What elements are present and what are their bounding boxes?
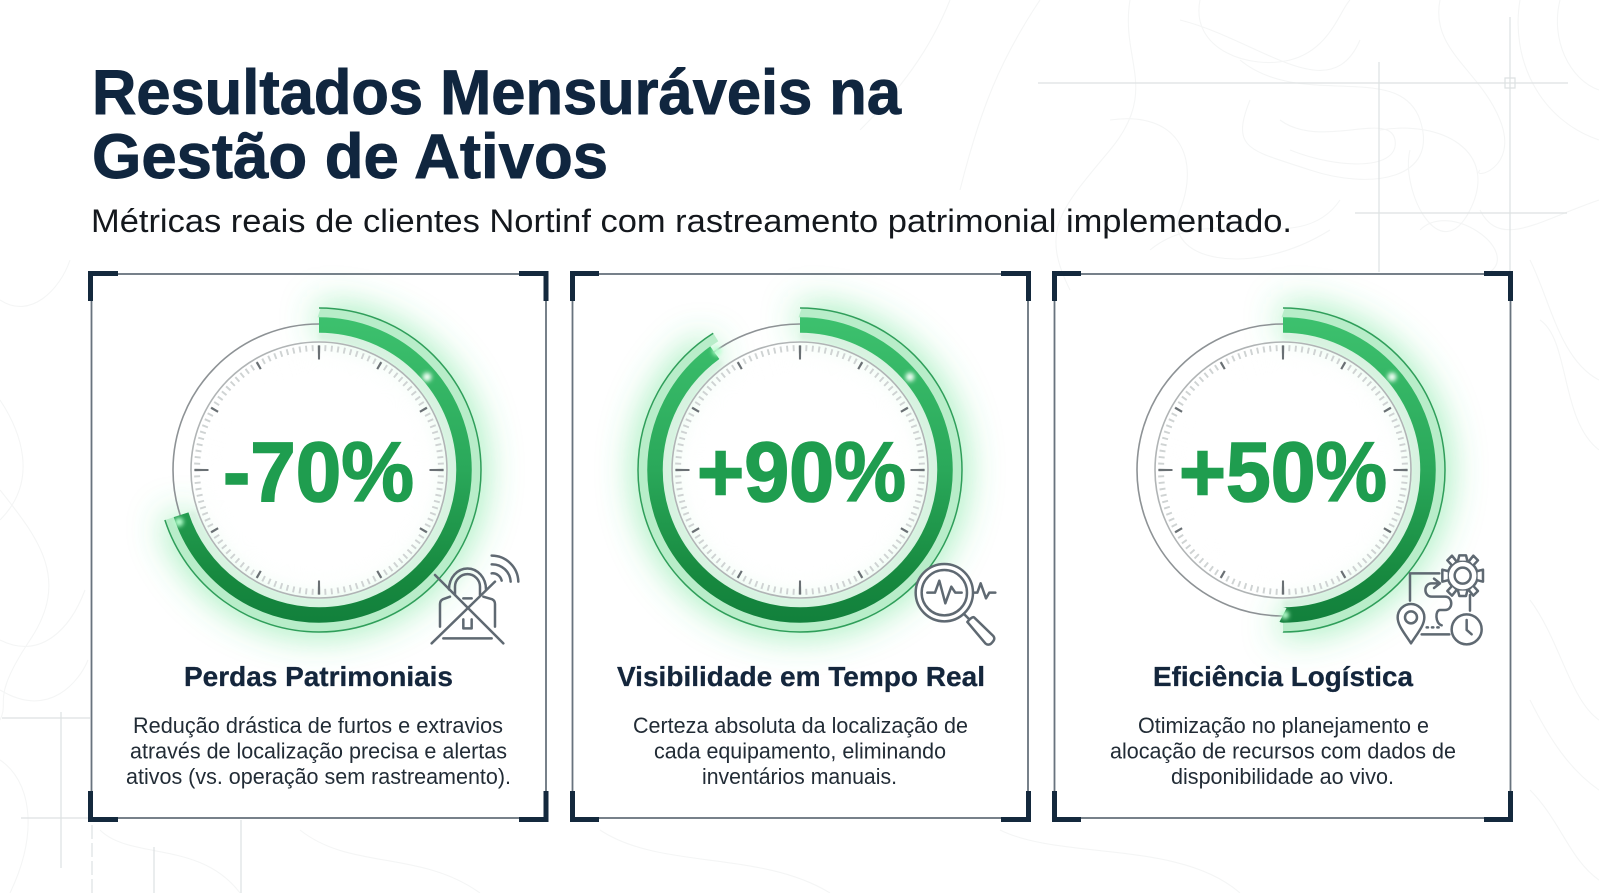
- card heading: Visibilidade em Tempo Real: [617, 661, 985, 692]
- value: +90%: [697, 425, 906, 519]
- panel: eficiencia logistica: [1054, 274, 1510, 820]
- title: Resultados Mensuráveis na: [92, 58, 902, 128]
- card frame with corner brackets: [572, 274, 1028, 820]
- card description: Otimização no planejamento e: [1138, 713, 1429, 738]
- panel: perdas patrimoniais: [90, 274, 546, 820]
- card heading: Eficiência Logística: [1153, 661, 1413, 692]
- gauge: +50%: [1121, 308, 1445, 632]
- card description: [633, 713, 968, 789]
- card description: Certeza absoluta da localização de: [633, 713, 968, 738]
- icon: route, gear, pin and clock: [1398, 555, 1483, 644]
- title: Gestão de Ativos: [92, 122, 608, 192]
- card description: alocação de recursos com dados de: [1110, 738, 1456, 764]
- card heading: Perdas Patrimoniais: [184, 661, 453, 692]
- gauge: +90%: [638, 308, 962, 632]
- card description: cada equipamento, eliminando: [654, 738, 946, 764]
- icon: magnifier with pulse: [916, 564, 995, 645]
- card description: [1110, 713, 1456, 789]
- subtitle: Métricas reais de clientes Nortinf com rastreamento patrimonial implementado.: [91, 203, 1292, 239]
- card description: através de localização precisa e alertas: [130, 738, 507, 764]
- gauge: -70%: [157, 308, 481, 632]
- icon: crossed lock with signal: [432, 556, 518, 643]
- card description: disponibilidade ao vivo.: [1171, 764, 1394, 789]
- panel: visibilidade em tempo real: [572, 274, 1028, 820]
- card frame with corner brackets: [1054, 274, 1510, 820]
- card frame with corner brackets: [90, 274, 546, 820]
- title: [92, 58, 902, 192]
- card description: Redução drástica de furtos e extravios: [133, 713, 503, 738]
- card description: [126, 713, 511, 789]
- card description: inventários manuais.: [702, 764, 897, 789]
- value: +50%: [1179, 425, 1387, 519]
- value: -70%: [223, 425, 414, 519]
- card description: ativos (vs. operação sem rastreamento).: [126, 764, 511, 789]
